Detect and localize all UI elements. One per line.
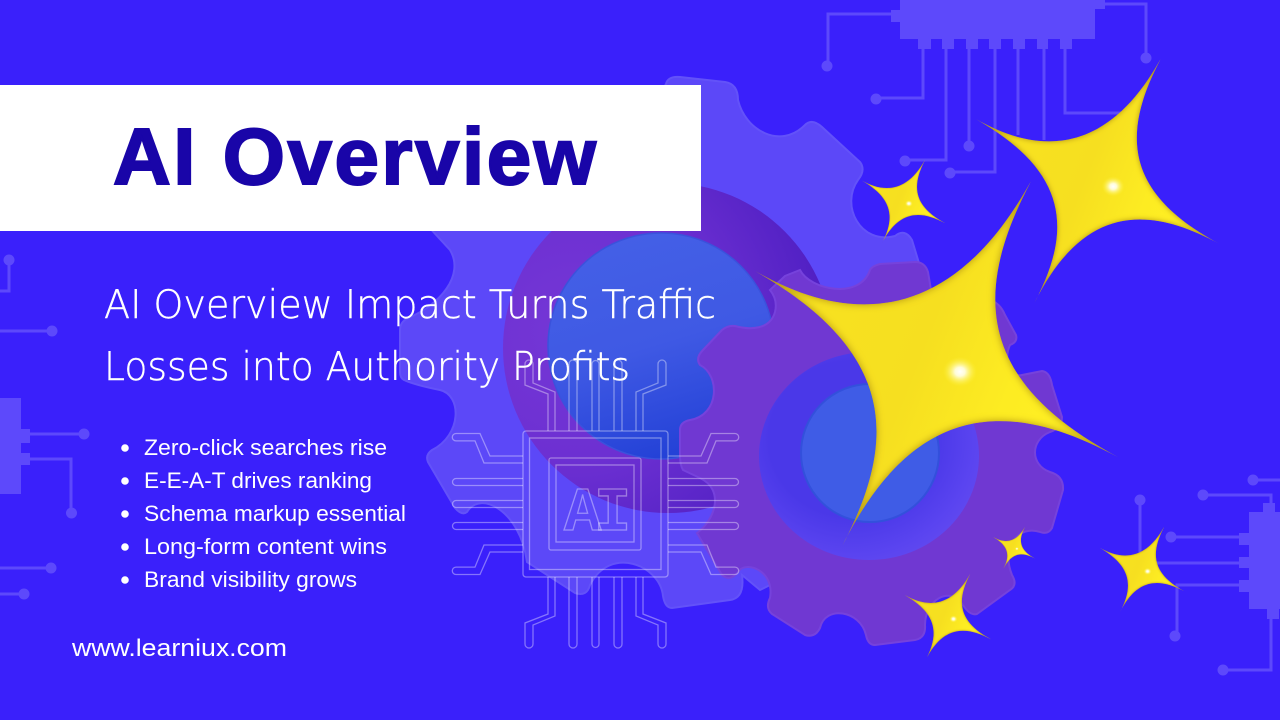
website url: www.learniux.com [71, 635, 287, 662]
subtitle: Losses into Authority Profits [104, 345, 630, 390]
circuit decoration: top chip [822, 0, 1152, 178]
chip label: AI [564, 478, 631, 549]
star: lower centre [905, 574, 991, 660]
back gear [400, 77, 940, 608]
bullet list: Zero-click searches rise [144, 435, 387, 460]
bullet list: Long-form content wins [144, 534, 387, 559]
icon: AI chip outline [452, 360, 739, 648]
title banner [0, 85, 701, 231]
star: tiny [993, 527, 1035, 569]
circuit decoration: left chip [0, 254, 90, 600]
title: AI Overview [113, 112, 597, 201]
bullet list: Brand visibility grows [144, 567, 357, 592]
star: large centre [755, 182, 1118, 546]
front gear [680, 262, 1063, 645]
bullet list [121, 435, 406, 592]
bullet list: Schema markup essential [144, 501, 406, 526]
circuit decoration: right chip [1134, 474, 1280, 676]
bullet list: E-E-A-T drives ranking [144, 468, 372, 493]
star: lower right [1099, 527, 1185, 612]
subtitle [104, 283, 716, 390]
star: small upper [862, 160, 945, 244]
star: upper right [976, 59, 1219, 303]
subtitle: AI Overview Impact Turns Traffic [104, 283, 716, 328]
